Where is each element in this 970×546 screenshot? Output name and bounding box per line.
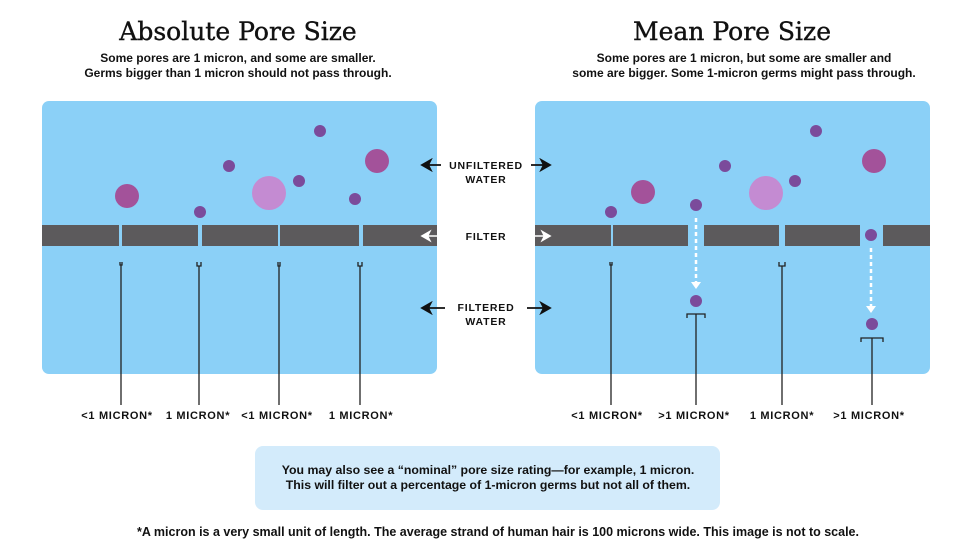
- micron labels: 1 MICRON*: [166, 410, 230, 422]
- center labels with arrows: [422, 160, 550, 328]
- center labels with arrows: FILTER: [466, 231, 506, 243]
- title: mean pore size: [572, 17, 916, 80]
- micron labels: >1 MICRON*: [833, 410, 905, 422]
- title: mean pore size: Some pores are 1 micron, but some are smaller and: [597, 51, 891, 65]
- germs right: [605, 125, 886, 330]
- title: absolute pore size: Absolute Pore Size: [118, 17, 357, 46]
- title: absolute pore size: Some pores are 1 micron, and some are smaller.: [100, 51, 376, 65]
- callout: nominal pore size: [255, 446, 720, 510]
- micron labels: <1 MICRON*: [81, 410, 153, 422]
- filter bar left: [42, 225, 437, 246]
- pore markers left: [120, 262, 362, 405]
- footnote: *A micron is a very small unit of length. The average strand of human hair is 100 microns wide. This image is not to scale.: [137, 525, 859, 539]
- center labels with arrows: WATER: [465, 316, 507, 328]
- micron labels: 1 MICRON*: [329, 410, 393, 422]
- center labels with arrows: FILTERED: [458, 302, 514, 314]
- title: mean pore size: Mean Pore Size: [633, 17, 831, 46]
- center labels with arrows: UNFILTERED: [449, 160, 523, 172]
- title: absolute pore size: Germs bigger than 1 micron should not pass through.: [84, 66, 392, 80]
- title: mean pore size: some are bigger. Some 1-micron germs might pass through.: [572, 66, 916, 80]
- callout: nominal pore size: You may also see a “nominal” pore size rating—for example, 1 micron.: [282, 463, 694, 477]
- germs left: [115, 125, 389, 218]
- arrows: germs passing: [691, 218, 876, 313]
- center labels with arrows: WATER: [465, 174, 507, 186]
- panel: absolute: [42, 101, 437, 405]
- panel: mean: [535, 101, 930, 405]
- micron labels: <1 MICRON*: [241, 410, 313, 422]
- callout: nominal pore size: This will filter out a percentage of 1-micron germs but not all of them.: [286, 478, 690, 492]
- micron labels: [81, 410, 905, 422]
- filter bar right: [535, 225, 930, 246]
- micron labels: <1 MICRON*: [571, 410, 643, 422]
- pore markers right: [610, 262, 883, 405]
- micron labels: >1 MICRON*: [658, 410, 730, 422]
- micron labels: 1 MICRON*: [750, 410, 814, 422]
- title: absolute pore size: [84, 17, 392, 80]
